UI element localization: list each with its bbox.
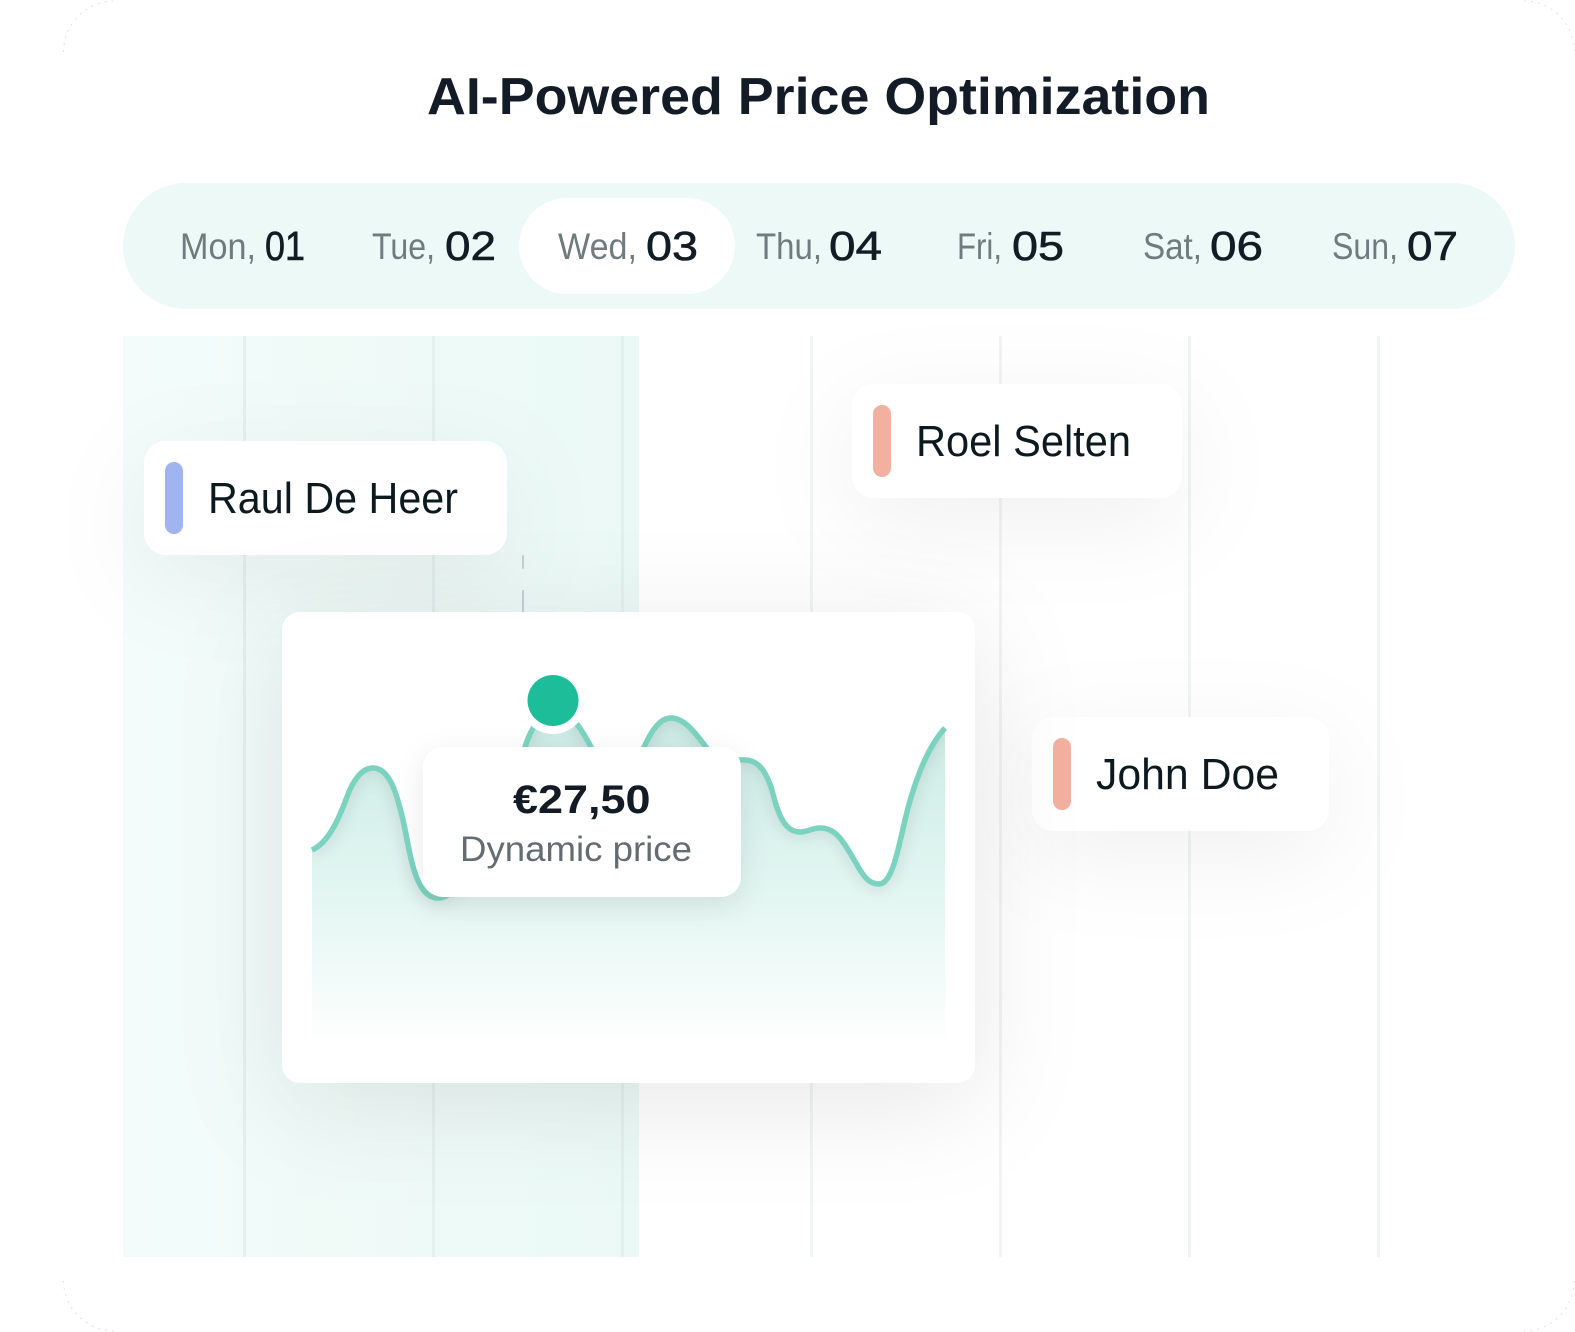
day: Friday	[957, 223, 1064, 269]
price tooltip: €27,50	[513, 778, 650, 822]
bar background	[123, 183, 1515, 309]
tag: Raul De Heer: Raul De Heer	[208, 474, 458, 523]
tag: John Doe: John Doe	[1096, 750, 1279, 799]
price tooltip: Dynamic price	[460, 830, 692, 869]
price tooltip	[423, 747, 741, 897]
day: Friday: Fri,	[957, 226, 1002, 267]
selected day highlight	[519, 198, 735, 294]
day selector bar	[123, 183, 1515, 309]
day: Tuesday	[372, 223, 496, 269]
curve shadow	[312, 712, 945, 898]
grid lines	[243, 336, 1380, 1257]
day: Tuesday: Tue,	[372, 226, 435, 267]
selected column highlight	[123, 336, 639, 1257]
day: Sunday: Sun,	[1332, 226, 1398, 267]
title: AI-Powered Price Optimization	[427, 68, 1210, 126]
day: Wednesday: Wed,	[558, 226, 637, 267]
area under price curve	[312, 712, 945, 1048]
day: Monday: 01	[265, 223, 305, 269]
day: Thursday: Thu,	[756, 226, 822, 267]
day: Saturday: Sat,	[1143, 226, 1202, 267]
day: Monday	[180, 223, 305, 269]
price curve	[312, 712, 945, 898]
day: Monday: Mon,	[180, 226, 256, 267]
tag: Roel Selten: Roel Selten	[916, 417, 1131, 466]
tag: Raul De Heer	[144, 441, 507, 555]
day: Thursday	[756, 223, 882, 269]
day: Thursday: 04	[829, 223, 882, 269]
day: Tuesday: 02	[445, 223, 496, 269]
day: Wednesday	[558, 223, 698, 269]
day: Saturday: 06	[1210, 223, 1263, 269]
day: Friday: 05	[1012, 223, 1064, 269]
dashed connector	[522, 555, 524, 612]
day: Wednesday: 03	[646, 223, 698, 269]
chart card	[282, 612, 975, 1083]
tag: Roel Selten	[852, 384, 1182, 498]
tag: John Doe	[1032, 717, 1329, 831]
day: Sunday	[1332, 223, 1458, 269]
day: Sunday: 07	[1407, 223, 1458, 269]
marker dot	[520, 668, 586, 734]
card background	[282, 612, 975, 1083]
day: Saturday	[1143, 223, 1263, 269]
